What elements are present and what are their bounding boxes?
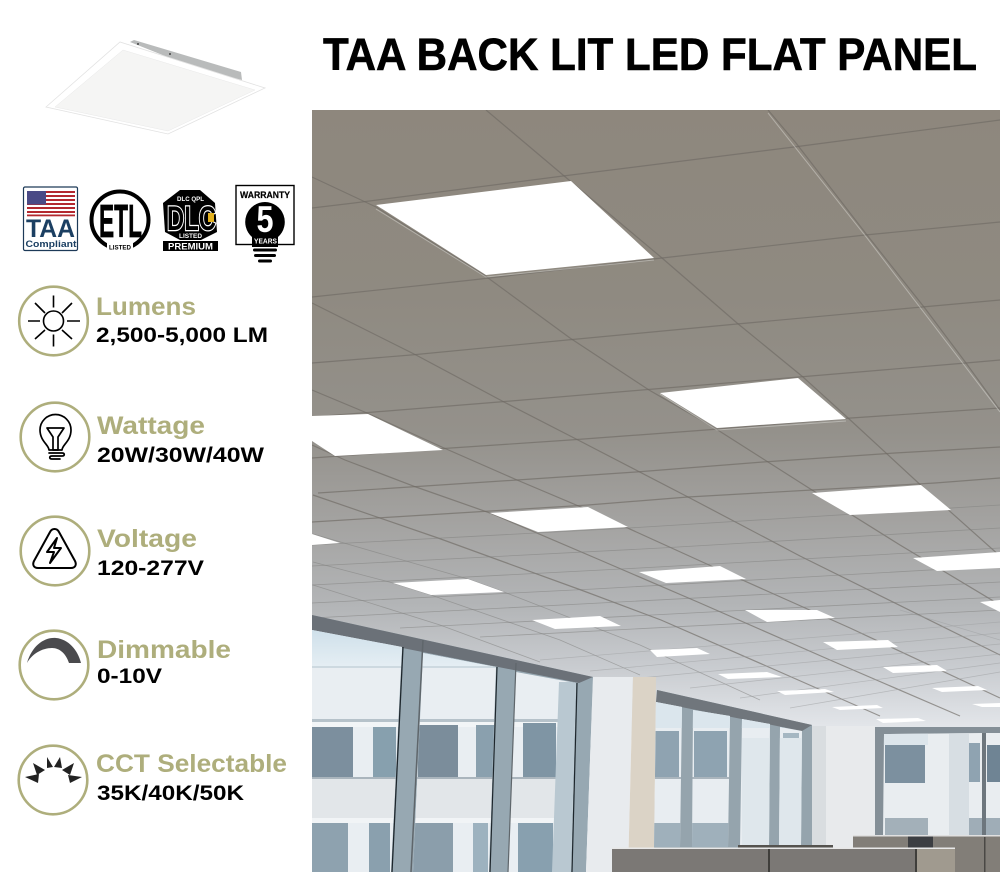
lit ceiling panels <box>312 181 1000 723</box>
photo: office ceiling with installed panels <box>312 110 1000 872</box>
CCT value: 35K/40K/50K <box>97 782 244 805</box>
badge: TAA compliant <box>24 187 78 250</box>
spec: wattage <box>21 403 264 471</box>
icon: dimmer arc <box>20 631 88 699</box>
icon: high voltage triangle <box>21 517 89 585</box>
voltage value: 120-277V <box>97 557 204 580</box>
badge: DLC premium <box>163 190 218 252</box>
lumens value: 2,500-5,000 LM <box>96 324 268 347</box>
spec: CCT selectable <box>19 746 287 814</box>
badge: DLC premium: LISTED <box>179 234 203 240</box>
badge: 5 year warranty: YEARS <box>254 236 277 246</box>
product image: LED flat panel <box>46 40 265 134</box>
lumens label: Lumens <box>96 293 196 321</box>
dimmable value: 0-10V <box>97 665 162 688</box>
spec: voltage <box>21 517 204 585</box>
badge: 5 year warranty: WARRANTY <box>240 190 290 200</box>
pillar <box>586 677 656 872</box>
icon: sun <box>19 287 88 355</box>
badge: ETL listed <box>92 192 148 252</box>
right window <box>875 727 1000 835</box>
spec: dimmable <box>20 631 231 699</box>
wattage label: Wattage <box>97 412 205 440</box>
spec: lumens <box>19 287 268 355</box>
dimmable label: Dimmable <box>97 636 231 664</box>
badge: DLC premium: DLC <box>167 200 216 238</box>
center window wall <box>654 690 812 850</box>
badge: DLC premium: PREMIUM <box>168 242 213 252</box>
ceiling grid lines <box>312 110 1000 716</box>
icon: sun rays <box>19 746 87 814</box>
wattage value: 20W/30W/40W <box>97 444 264 467</box>
badge: TAA compliant: TAA <box>26 215 75 243</box>
badge: ETL listed: ETL <box>99 195 142 247</box>
icon: light bulb <box>21 403 89 471</box>
badge: 5 year warranty <box>236 186 294 262</box>
CCT label: CCT Selectable <box>96 750 287 778</box>
voltage label: Voltage <box>97 525 197 553</box>
right wall <box>812 726 875 848</box>
badge: DLC premium: DLC QPL <box>177 197 204 203</box>
ceiling surface <box>312 110 1000 740</box>
badge: TAA compliant: Compliant <box>26 239 77 250</box>
badge: ETL listed: LISTED <box>109 246 132 252</box>
left window wall <box>312 615 593 872</box>
badge: 5 year warranty: 5 <box>256 199 274 240</box>
cubicle partitions <box>612 835 1000 872</box>
